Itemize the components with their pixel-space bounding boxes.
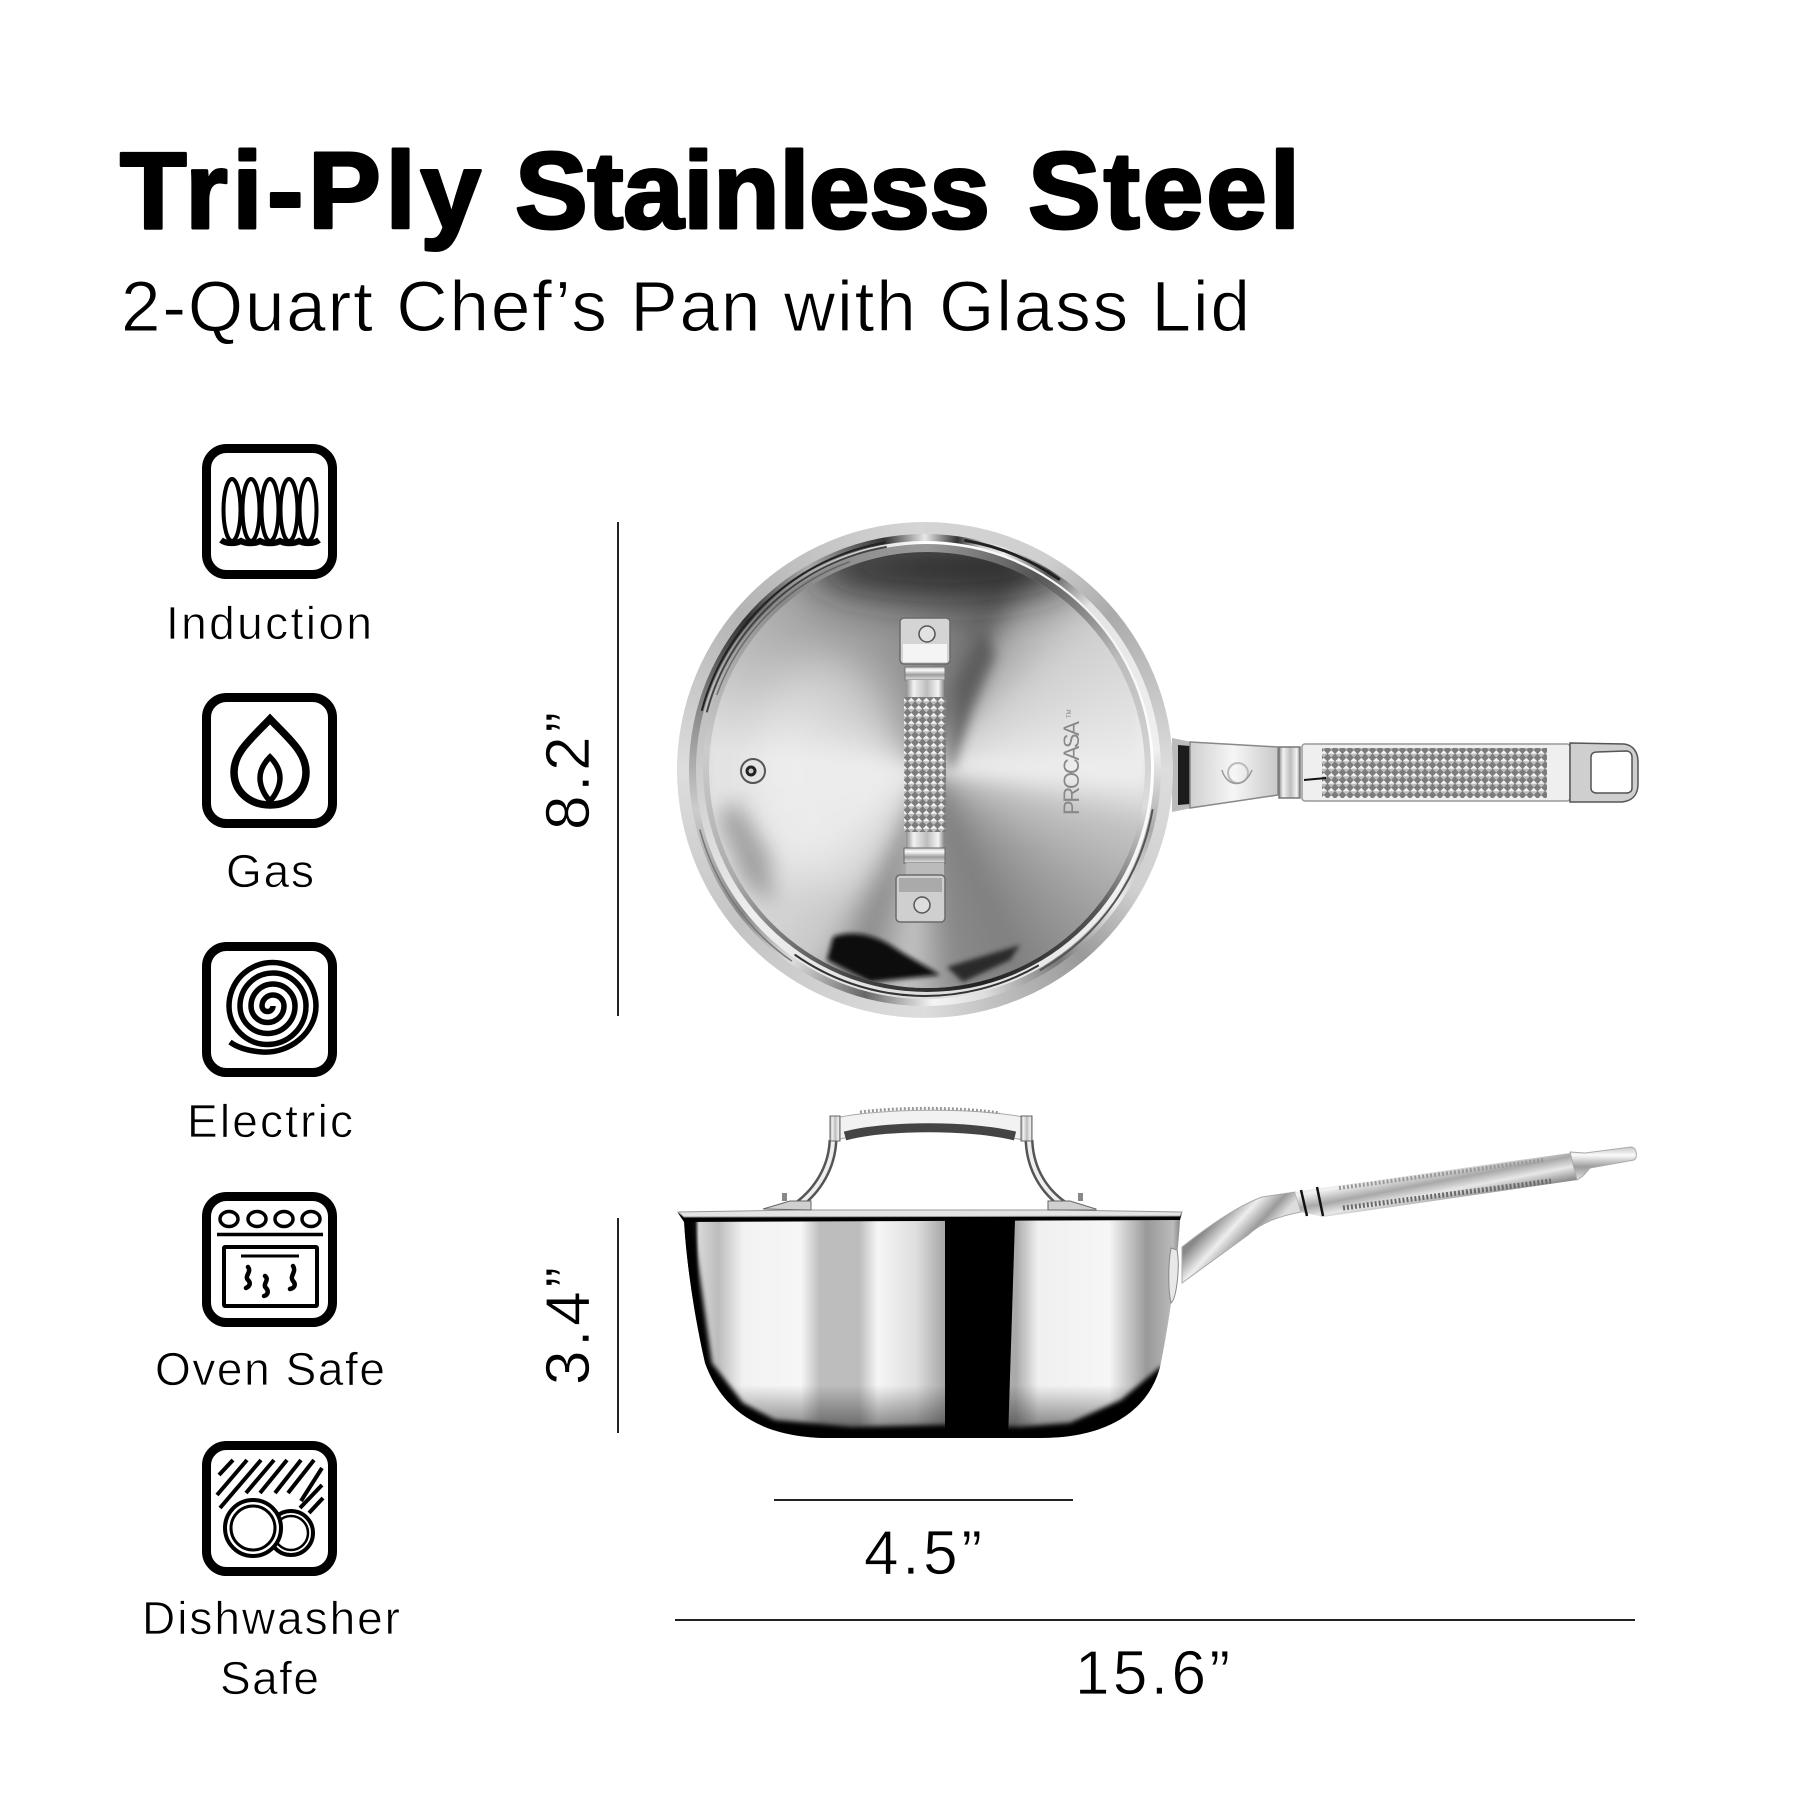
lid handle top view — [896, 618, 950, 922]
side view long handle — [1182, 1147, 1636, 1283]
label: electric: Electric — [187, 1095, 353, 1147]
label: dishwasher safe: Dishwasher — [142, 1592, 400, 1644]
pan: top view — [675, 520, 1638, 1024]
title: Tri-Ply — [120, 130, 481, 252]
title: Stainless — [515, 130, 990, 252]
pan rim — [678, 1210, 1182, 1222]
pan: side view — [678, 1108, 1636, 1445]
subtitle: 2-Quart Chef’s Pan with Glass Lid — [121, 268, 1250, 347]
title: Steel — [1028, 130, 1300, 252]
label: oven safe: Oven Safe — [155, 1343, 385, 1395]
dimension: height 3.4 in: 3.4” — [534, 1267, 603, 1385]
label: gas: Gas — [226, 845, 314, 897]
label: dishwasher safe — [142, 1592, 400, 1704]
dimension: base 4.5 in: 4.5” — [864, 1519, 982, 1588]
icon: gas flame — [206, 698, 332, 824]
icon column: cooktop compatibility — [142, 448, 400, 1704]
pan body — [684, 1220, 1180, 1445]
label: dishwasher safe: Safe — [220, 1652, 319, 1704]
title — [120, 130, 1300, 252]
icon: induction — [206, 448, 332, 574]
icon: electric coil — [206, 946, 332, 1072]
rim highlight streaks — [700, 540, 1152, 996]
lid steam vent knob — [741, 759, 765, 783]
lid handle side view — [763, 1108, 1096, 1210]
label: induction: Induction — [166, 597, 372, 649]
pan rim rings — [675, 520, 1179, 1024]
dimension: length 15.6 in: 15.6” — [1075, 1639, 1230, 1708]
lid reflections — [713, 552, 1075, 984]
top view long handle — [1172, 738, 1638, 812]
brand mark on lid: PROCASA — [1059, 721, 1084, 815]
icon: oven — [206, 1196, 332, 1322]
brand mark on lid: TM — [1067, 709, 1073, 718]
dimension: diameter 8.2 in: 8.2” — [534, 712, 603, 830]
icon: dishwasher — [206, 1446, 332, 1572]
